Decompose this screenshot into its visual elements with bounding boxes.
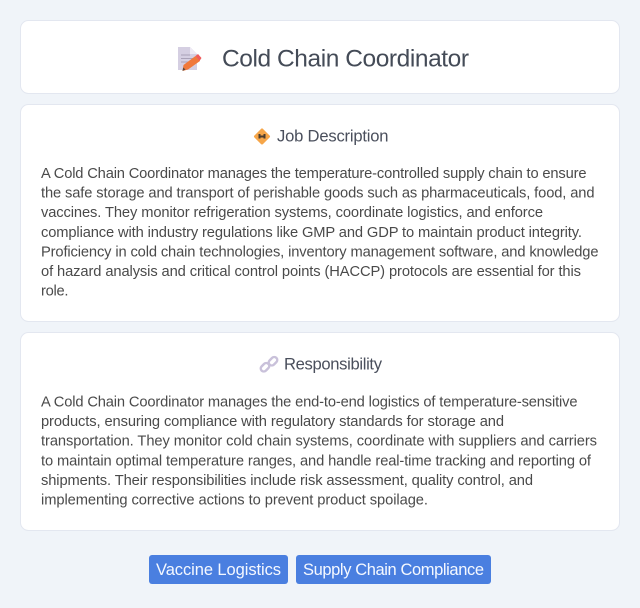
text block: responsibility: transportation. They monitor cold chain systems, coordinate with suppliers and carriers (41, 434, 597, 450)
icon: orange diamond (256, 130, 268, 143)
text block: responsibility: to maintain optimal temperature ranges, and handle real-time tracking and reporting of (41, 453, 592, 469)
tag: supply chain compliance (296, 555, 491, 584)
title text: Cold Chain Coordinator (222, 46, 469, 72)
text block: job description (41, 166, 598, 300)
panel: responsibility (20, 332, 620, 530)
tag: supply chain compliance: Supply Chain Compliance (303, 561, 484, 579)
text block: job description: the safe storage and transport of perishable goods such as pharmaceuticals, food, and (41, 186, 594, 202)
tag: vaccine logistics: Vaccine Logistics (156, 561, 281, 579)
text block: job description: role. (41, 284, 68, 300)
text block: responsibility: implementing corrective actions to prevent product spoilage. (41, 492, 428, 508)
text block: responsibility (41, 394, 597, 508)
heading: responsibility: Responsibility (284, 354, 383, 374)
text block: job description: of hazard analysis and critical control points (HACCP) protocols are essential for this (41, 264, 581, 280)
panel: job description (20, 104, 620, 322)
text block: job description: Proficiency in cold chain technologies, inventory management software, and knowledge (41, 244, 598, 260)
panel: title (20, 20, 620, 94)
tag: vaccine logistics (149, 555, 288, 584)
text block: job description: A Cold Chain Coordinator manages the temperature-controlled supply chain to ensure (41, 166, 586, 182)
icon: chain link (260, 356, 278, 373)
text block: responsibility: products, ensuring compliance with regulatory standards for storage and (41, 414, 504, 430)
heading: job description: Job Description (277, 126, 388, 146)
text block: responsibility: shipments. Their responsibilities include risk assessment, quality control, and (41, 473, 533, 489)
text block: job description: compliance with industry regulations like GMP and GDP to maintain product integrity. (41, 225, 582, 241)
text block: responsibility: A Cold Chain Coordinator manages the end-to-end logistics of temperature-sensitive (41, 394, 578, 410)
icon: document with pencil (178, 47, 202, 71)
text block: job description: vaccines. They monitor refrigeration systems, coordinate logistics, and enforce (41, 205, 543, 221)
